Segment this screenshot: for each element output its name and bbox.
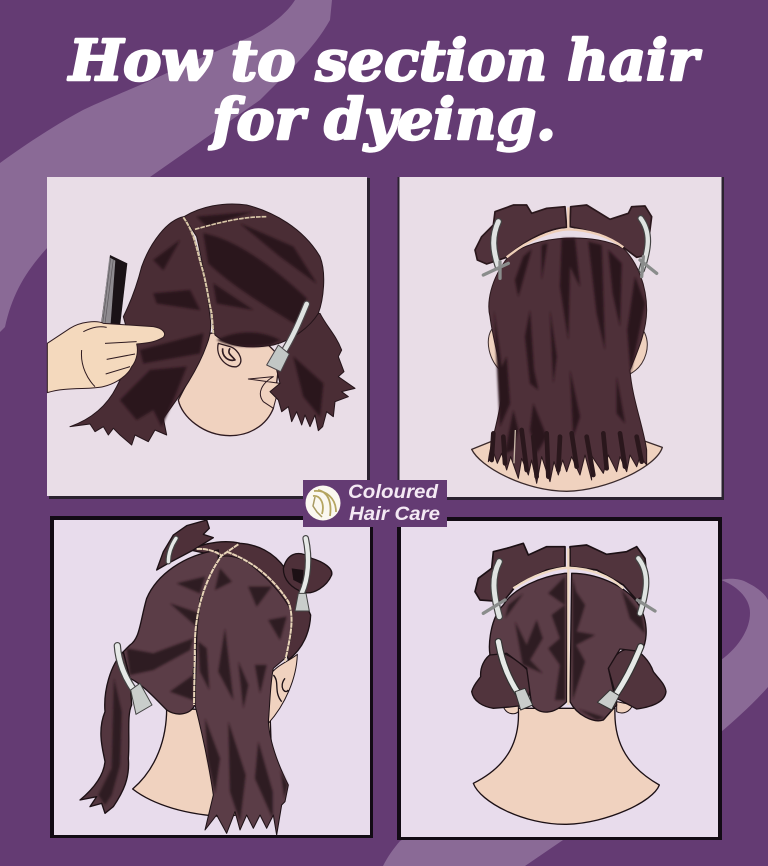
jaw line <box>248 377 280 408</box>
long section streaks <box>198 568 287 822</box>
logo text: Hair Care <box>349 503 440 525</box>
left hair section <box>70 217 211 445</box>
part lines <box>507 207 623 257</box>
right hair section <box>184 204 324 347</box>
light hair strand <box>514 430 515 463</box>
top part line <box>195 217 267 229</box>
part lines <box>194 544 292 705</box>
dark streaks <box>120 212 323 427</box>
logo badge <box>303 480 447 527</box>
clips <box>483 558 655 710</box>
ear <box>218 343 241 367</box>
panel 4: four sections clipped <box>397 517 722 840</box>
panel 1: parting hair with comb <box>47 177 370 499</box>
lower right hair flap <box>270 313 355 431</box>
long center section <box>195 556 292 835</box>
main hair <box>488 238 647 483</box>
panel 2: back section down <box>398 177 724 500</box>
shoulders <box>472 441 662 491</box>
right lower bun <box>608 649 666 709</box>
part lines <box>513 548 623 705</box>
upper left bunch <box>157 520 213 570</box>
ear <box>268 654 297 723</box>
ponytail <box>80 652 132 813</box>
hand <box>47 322 165 393</box>
upper right bunch <box>570 205 652 257</box>
upper left bunch <box>475 543 565 602</box>
ears <box>488 329 647 374</box>
left scalp section <box>489 573 567 712</box>
hair streaks <box>494 238 645 453</box>
crown hair <box>190 542 311 660</box>
scalp streaks <box>505 577 645 720</box>
background swoosh: top left <box>0 0 332 332</box>
title <box>67 28 702 153</box>
title: for dyeing. <box>208 87 556 153</box>
comb <box>101 255 127 327</box>
right bun <box>283 554 332 593</box>
clip <box>267 304 307 372</box>
upper clips <box>483 218 657 278</box>
neck <box>178 330 280 436</box>
left section hair <box>123 550 218 714</box>
left lower bun <box>472 652 530 708</box>
neck <box>133 708 273 817</box>
clips <box>117 538 309 714</box>
logo text: Coloured <box>348 481 439 503</box>
hair tip streaks <box>492 430 642 477</box>
upper left bunch <box>475 205 567 264</box>
left part line <box>183 217 213 333</box>
logo text <box>348 481 440 525</box>
background swoosh: lower right <box>383 579 768 866</box>
title: How to section hair <box>67 28 702 94</box>
right scalp section <box>570 573 646 721</box>
ears <box>503 702 633 714</box>
neck <box>473 708 659 824</box>
upper right bunch <box>570 545 647 600</box>
logo icon: hair profile <box>306 486 340 520</box>
panel 3: two back sections, side view <box>50 516 373 838</box>
